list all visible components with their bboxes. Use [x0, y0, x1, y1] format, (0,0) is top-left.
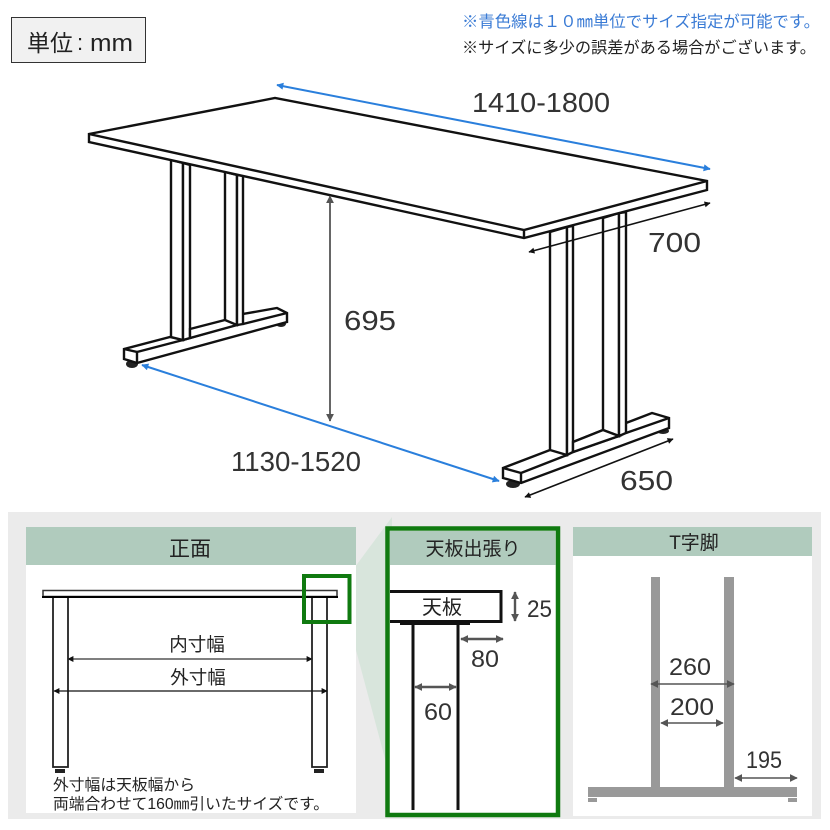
- lower background band: [8, 512, 821, 819]
- dimension 195: [735, 747, 797, 778]
- front view header: 正面: [169, 538, 211, 561]
- dimension 60: 60: [424, 699, 452, 726]
- right T-leg: [503, 212, 669, 488]
- panel: T-leg: [573, 527, 812, 816]
- dimension 25: [515, 592, 552, 623]
- T-leg header: [573, 527, 812, 556]
- front view caption: 外寸幅は天板幅から: [53, 776, 195, 794]
- dimension 25: 25: [527, 596, 552, 623]
- tabletop section: [390, 592, 501, 625]
- highlight square: [304, 576, 350, 622]
- panel: front view: [26, 527, 356, 813]
- leg section: [413, 624, 458, 810]
- overhang header: 天板出張り: [425, 538, 521, 560]
- overhang header: [390, 531, 556, 565]
- dimension 60: [415, 687, 456, 726]
- tabletop section: 天板: [422, 596, 462, 619]
- dimension: depth 700: [529, 203, 710, 258]
- note: blue lines adjustable: ※青色線は１０㎜単位でサイズ指定が可能です。: [462, 13, 820, 31]
- dimension: top length 1410-1800: 1410-1800: [472, 87, 610, 118]
- note: size tolerance: ※サイズに多少の誤差がある場合がございます。: [462, 38, 816, 57]
- inner width dimension: 内寸幅: [169, 634, 225, 655]
- table top: [89, 98, 707, 238]
- unit label box: 単位: [27, 30, 73, 56]
- dimension 260: [651, 654, 734, 684]
- front view header: [26, 527, 356, 565]
- panel: top overhang detail: [388, 528, 558, 815]
- dimension 260: 260: [669, 654, 711, 681]
- unit label box: :: [77, 30, 83, 55]
- dimension: foot 650: 650: [620, 465, 673, 496]
- unit label box: [12, 18, 146, 62]
- front view caption: 両端合わせて160㎜引いたサイズです。: [53, 795, 329, 813]
- left T-leg: [124, 160, 287, 368]
- zoom connector wedge: [349, 517, 392, 785]
- dimension 200: 200: [670, 694, 714, 721]
- dimension: top length 1410-1800: [277, 85, 710, 169]
- dimension 80: [461, 639, 503, 673]
- dimension 80: 80: [471, 646, 499, 673]
- dimension: inner length 1130-1520: 1130-1520: [231, 446, 361, 477]
- unit label box: mm: [90, 30, 133, 57]
- dimension 195: 195: [746, 747, 782, 774]
- dimension: foot 650: [525, 439, 673, 497]
- dimension 200: [661, 694, 723, 723]
- T-leg header: T字脚: [669, 532, 719, 554]
- outer width dimension: 外寸幅: [170, 667, 226, 688]
- table illustration: [89, 98, 707, 488]
- dimension: depth 700: 700: [648, 227, 701, 258]
- front view table drawing: [42, 590, 338, 773]
- front view caption: [53, 776, 329, 813]
- T-leg drawing: [588, 577, 797, 802]
- dimension: height 695: 695: [344, 305, 396, 336]
- dimension: inner length 1130-1520: [142, 365, 499, 481]
